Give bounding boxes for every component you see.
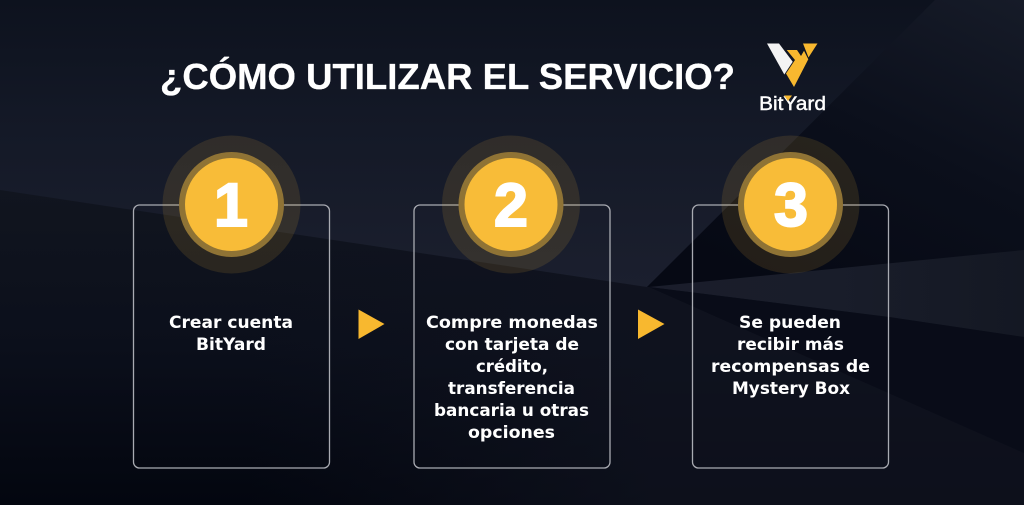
step 3 badge: [722, 136, 860, 274]
step 3 text: recibir más: [737, 335, 844, 354]
step 2 text: con tarjeta de: [445, 335, 579, 354]
step 1 text: Crear cuenta: [169, 313, 293, 332]
step 2 text: Compre monedas: [426, 313, 598, 332]
arrow: step 2 to 3: [638, 310, 664, 339]
step 1 text: [169, 313, 293, 354]
step 1 badge: [162, 136, 300, 274]
step 2 text: bancaria u otras: [434, 401, 589, 420]
step 3 text: Se pueden: [739, 313, 841, 332]
step 1 text: BitYard: [196, 335, 266, 354]
step 3 text: recompensas de: [711, 357, 870, 376]
logo wordmark: BitYard: [759, 94, 826, 115]
step 2 text: opciones: [468, 423, 555, 442]
step 2 text: transferencia: [448, 379, 575, 398]
arrow: step 1 to 2: [358, 310, 384, 339]
panel: step 1: [134, 136, 330, 468]
logo mark: [767, 44, 818, 87]
panel: step 2: [414, 136, 610, 468]
logo: BitYard: [759, 44, 826, 115]
step 2 badge: [442, 136, 580, 274]
step 3 text: [711, 313, 870, 398]
step 2 badge: 2: [494, 171, 528, 239]
step 2 text: [426, 313, 598, 442]
step 1 badge: 1: [214, 171, 248, 239]
step 3 badge: 3: [774, 171, 808, 239]
title: ¿CÓMO UTILIZAR EL SERVICIO?: [160, 55, 735, 97]
step 3 text: Mystery Box: [732, 379, 850, 398]
step 2 text: crédito,: [476, 357, 548, 376]
panel: step 3: [692, 136, 888, 468]
